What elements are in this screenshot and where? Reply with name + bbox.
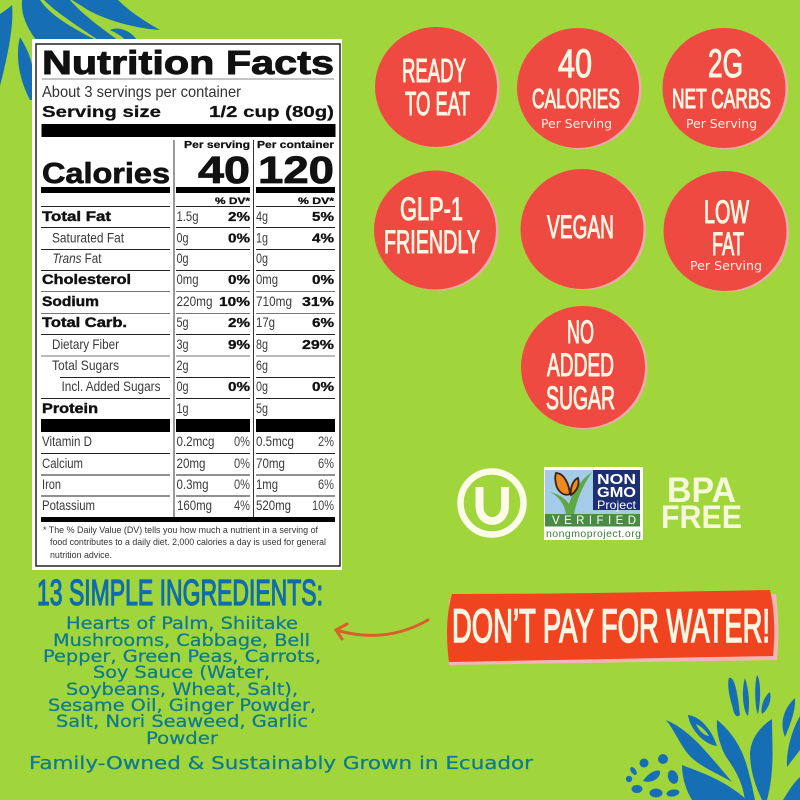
vitamins and minerals rows: 0.3mg	[176, 476, 208, 492]
badge: 2g net carbs: 2G	[708, 42, 743, 86]
calories header: % DV*	[298, 196, 334, 207]
vitamins and minerals rows: 4%	[234, 497, 250, 513]
badge: ready to eat: READY	[402, 52, 466, 89]
ingredients heading: 13 SIMPLE INGREDIENTS:	[37, 572, 323, 613]
calories header	[41, 140, 335, 207]
nutrient rows: 31%	[302, 295, 334, 309]
nutrient rows: 1g	[176, 400, 188, 416]
ingredients list: Salt, Nori Seaweed, Garlic	[56, 712, 308, 732]
nutrient rows: 4g	[256, 208, 268, 224]
nutrient rows: 5%	[312, 210, 334, 224]
badge: no added sugar: NO	[567, 314, 594, 350]
nutrient rows: 0%	[228, 380, 250, 394]
nutrient rows: 1.5g	[176, 208, 198, 224]
serving size	[42, 104, 334, 121]
nutrient rows: 0%	[228, 273, 250, 287]
footnote	[43, 525, 326, 561]
nutrient rows: 2%	[228, 210, 250, 224]
vitamins and minerals rows: 10%	[312, 497, 334, 513]
ingredients list: Soybeans, Wheat, Salt),	[66, 680, 298, 700]
badge: ready to eat: TO EAT	[405, 85, 470, 122]
calories header: % DV*	[215, 196, 250, 207]
nutrient rows: 710mg	[256, 293, 292, 309]
vitamins and minerals rows: 20mg	[176, 455, 206, 471]
badge: ready to eat	[375, 27, 500, 148]
nutrient rows: 220mg	[176, 293, 212, 309]
icon: non-gmo project verified: nongmoproject.org	[546, 528, 641, 540]
badge: 40 calories: CALORIES	[532, 83, 620, 114]
badge: no added sugar	[521, 306, 648, 429]
vitamins and minerals rows: 1mg	[256, 476, 278, 492]
nutrient rows: Cholesterol	[42, 271, 131, 287]
vitamins and minerals rows: 70mg	[256, 455, 285, 471]
vitamins and minerals rows: Iron	[42, 476, 61, 492]
ingredients list: Powder	[146, 729, 218, 749]
nutrient rows: Total Carb.	[42, 314, 127, 330]
nutrient rows: 0%	[228, 232, 250, 246]
serving size: 1/2 cup (80g)	[209, 104, 334, 121]
footnote: nutrition advice.	[50, 550, 112, 561]
bpa free text	[661, 471, 742, 535]
badge: 2g net carbs	[662, 28, 788, 149]
badge: low fat: FAT	[712, 226, 744, 262]
vitamins and minerals rows: 0.5mcg	[256, 433, 294, 449]
nutrient rows: 6%	[312, 316, 334, 330]
vitamins and minerals rows: 0%	[234, 476, 250, 492]
decorative leaves: top left	[0, 0, 160, 100]
nutrient rows: Total Fat	[42, 208, 111, 224]
nutrient rows: 0g	[176, 378, 188, 394]
icon: non-gmo project verified	[544, 467, 643, 540]
ingredients list: Mushrooms, Cabbage, Bell	[53, 631, 310, 651]
ingredients list	[43, 614, 321, 749]
badge: 40 calories: 40	[558, 42, 592, 86]
badge: 40 calories: Per Serving	[541, 117, 612, 131]
vitamins and minerals rows: Potassium	[42, 497, 95, 513]
vitamins and minerals rows: 0.2mcg	[176, 433, 214, 449]
footnote: * The % Daily Value (DV) tells you how much a nutrient in a serving of	[43, 525, 318, 536]
servings per container: About 3 servings per container	[42, 84, 242, 101]
nutrition facts panel	[32, 39, 342, 570]
nutrient rows: 0g	[176, 230, 188, 246]
nutrient rows: 8g	[256, 336, 268, 352]
calories header: 40	[198, 150, 250, 192]
nutrient rows: Trans Fat	[52, 250, 102, 266]
icon: butterfly	[555, 473, 579, 495]
nutrient rows	[42, 208, 334, 416]
icon: kosher U symbol	[460, 472, 524, 534]
badge: vegan: VEGAN	[547, 209, 614, 245]
nutrient rows: 2%	[228, 316, 250, 330]
vitamins and minerals rows	[42, 433, 334, 513]
nutrient rows: 0g	[256, 250, 268, 266]
serving size: Serving size	[42, 104, 161, 121]
calories header: Calories	[42, 158, 170, 190]
nutrient rows: Saturated Fat	[52, 230, 124, 246]
bpa free text: FREE	[661, 499, 742, 535]
nutrient rows: 0g	[176, 250, 188, 266]
badge: no added sugar: ADDED	[547, 347, 614, 383]
callout banner	[447, 590, 778, 665]
nutrient rows: Protein	[42, 400, 98, 416]
nutrient rows: 3g	[176, 336, 188, 352]
family-owned tagline: Family-Owned & Sustainably Grown in Ecuador	[29, 753, 534, 774]
badge: glp-1 friendly	[374, 170, 498, 290]
footnote: food contributes to a daily diet. 2,000 calories a day is used for general	[50, 537, 326, 548]
nutrition title: Nutrition Facts	[42, 44, 334, 81]
calories header: Per container	[257, 140, 334, 151]
nutrient rows: 0mg	[176, 271, 198, 287]
nutrient rows: 2g	[176, 357, 188, 373]
nutrient rows: 0%	[312, 273, 334, 287]
badge: 2g net carbs: Per Serving	[686, 117, 757, 131]
badge: 40 calories	[517, 28, 642, 149]
vitamins and minerals rows: Vitamin D	[42, 433, 92, 449]
nutrient rows: Incl. Added Sugars	[62, 378, 160, 394]
nutrient rows: 17g	[256, 314, 275, 330]
vitamins and minerals rows: 6%	[318, 476, 334, 492]
vitamins and minerals rows: 0%	[234, 433, 250, 449]
icon: non-gmo project verified: VERIFIED	[552, 515, 636, 527]
nutrient rows: 5g	[256, 400, 268, 416]
badge: low fat	[664, 171, 789, 292]
nutrient rows: 9%	[228, 338, 250, 352]
calories header: 120	[258, 150, 334, 192]
vitamins and minerals rows: 160mg	[177, 497, 212, 513]
decorative leaves: bottom right	[626, 675, 800, 800]
ingredients list: Pepper, Green Peas, Carrots,	[43, 647, 321, 667]
badge: no added sugar: SUGAR	[546, 380, 615, 416]
nutrient rows: 5g	[176, 314, 188, 330]
badge: glp-1 friendly: GLP-1	[400, 191, 463, 227]
vitamins and minerals rows: 2%	[318, 433, 334, 449]
badge: low fat: LOW	[704, 194, 749, 230]
nutrient rows: 4%	[312, 232, 334, 246]
nutrient rows: 29%	[302, 338, 334, 352]
nutrient rows: 1g	[256, 230, 268, 246]
calories header: Per serving	[184, 140, 250, 151]
vitamins and minerals rows: Calcium	[42, 455, 83, 471]
nutrient rows: Total Sugars	[52, 357, 119, 373]
arrow	[336, 620, 428, 639]
nutrient rows: 0%	[312, 380, 334, 394]
badge: vegan	[520, 169, 646, 290]
vitamins and minerals rows: 0%	[234, 455, 250, 471]
nutrient rows: 0g	[256, 378, 268, 394]
bpa free text: BPA	[667, 471, 736, 510]
vitamins and minerals rows: 6%	[318, 455, 334, 471]
icon: non-gmo project verified: NON	[597, 472, 636, 488]
ingredients list: Sesame Oil, Ginger Powder,	[48, 696, 316, 716]
ingredients list: Soy Sauce (Water,	[93, 663, 270, 683]
nutrient rows: 0mg	[256, 271, 278, 287]
icon: non-gmo project verified: Project	[597, 498, 637, 512]
nutrient rows: 10%	[219, 295, 250, 309]
badge: glp-1 friendly: FRIENDLY	[384, 224, 480, 260]
nutrient rows: 6g	[256, 357, 268, 373]
ingredients list: Hearts of Palm, Shiitake	[66, 614, 298, 634]
icon: non-gmo project verified: GMO	[597, 485, 636, 501]
nutrient rows: Dietary Fiber	[52, 336, 119, 352]
vitamins and minerals rows: 520mg	[256, 497, 291, 513]
nutrient rows: Sodium	[42, 293, 99, 309]
badge: low fat: Per Serving	[690, 259, 762, 273]
